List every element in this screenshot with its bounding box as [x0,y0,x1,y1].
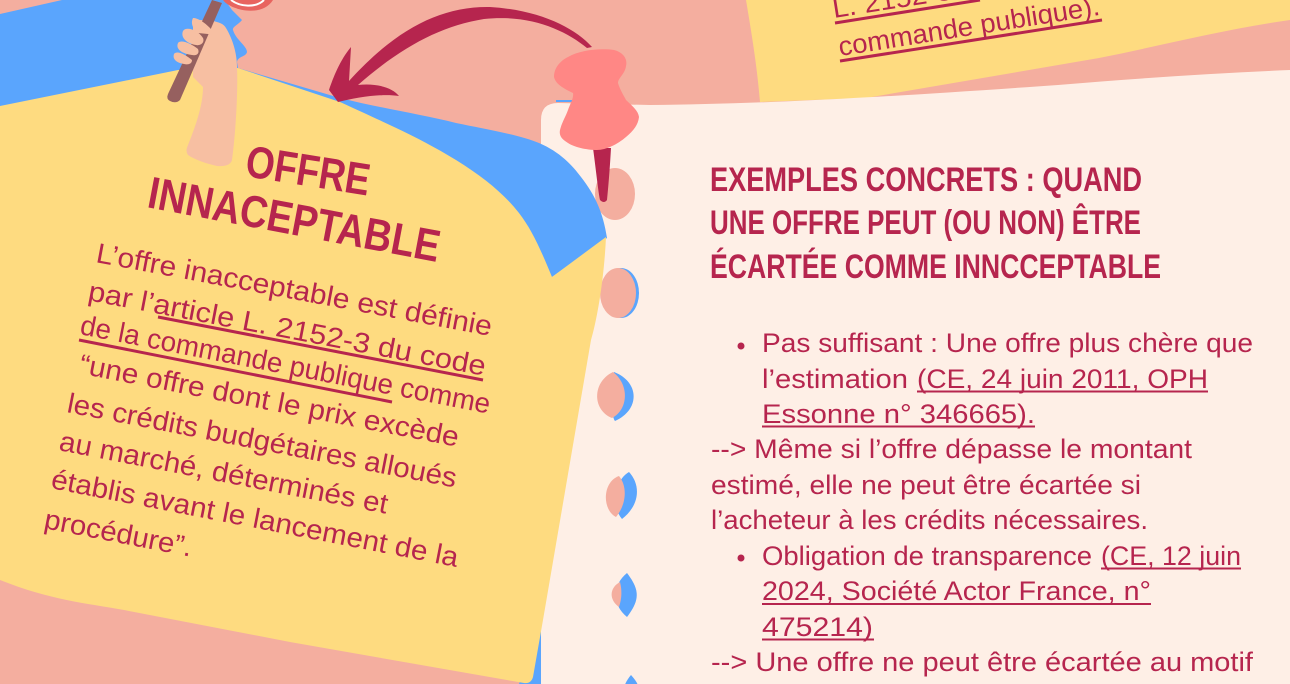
text: definition: procédure”. [42,503,195,563]
text block: examples list: Obligation de transparence [762,541,1092,571]
text: definition [42,237,495,573]
panel: right cream page [541,70,1290,684]
blue backing sheet [0,0,607,684]
text: definition: par l’article L. 2152-3 du code [86,275,489,382]
text: definition: établis avant le lancement de la [49,463,462,573]
text block: examples list: 475214) [762,612,873,642]
text: definition: au marché, déterminés et [57,425,391,520]
text block: examples list: --> Une offre ne peut être écartée au motif [711,647,1254,677]
text block: examples list: l’estimation [762,364,908,394]
text: definition: “une offre dont le prix excède [77,348,462,453]
arrow: from pin to note [329,7,592,102]
bullet: pas suffisant [738,342,744,350]
heading: exemples concrets [710,161,1161,286]
text block: examples list: Pas suffisant : Une offre plus chère que [762,328,1253,358]
text block: examples list: (CE, 12 juin [1101,541,1241,571]
panel: yellow note offre inacceptable [0,68,606,683]
icon: push pin [554,49,639,202]
text block: examples list: Essonne n° 346665). [762,399,1035,429]
bullet: obligation de transparence [738,554,744,562]
text: definition: L’offre inacceptable est définie [94,237,495,342]
heading: exemples concrets: EXEMPLES CONCRETS : QUAND [710,161,1142,199]
text: definition: de la commande publique comme [78,309,493,419]
text block: examples list [711,328,1254,677]
icon: hand holding sign [167,0,273,166]
heading: exemples concrets: ÉCARTÉE COMME INNCCEPTABLE [710,248,1161,286]
title: offre inacceptable: INNACEPTABLE [144,167,444,272]
text block: examples list: (CE, 24 juin 2011, OPH [917,364,1208,394]
text block: examples list: --> Même si l’offre dépasse le montant [711,434,1193,464]
title: offre inacceptable [144,136,444,272]
heading: exemples concrets: UNE OFFRE PEUT (OU NON) ÊTRE [710,204,1141,242]
text block: examples list: estimé, elle ne peut être écartée si [711,470,1141,500]
panel: top right yellow note [746,0,1290,102]
text block: examples list: 2024, Société Actor France, n° [762,576,1151,606]
title: offre inacceptable: OFFRE [242,136,374,205]
text: definition: les crédits budgétaires alloués [65,387,459,493]
text block: examples list: l’acheteur à les crédits nécessaires. [711,505,1148,535]
binder holes [595,168,640,684]
